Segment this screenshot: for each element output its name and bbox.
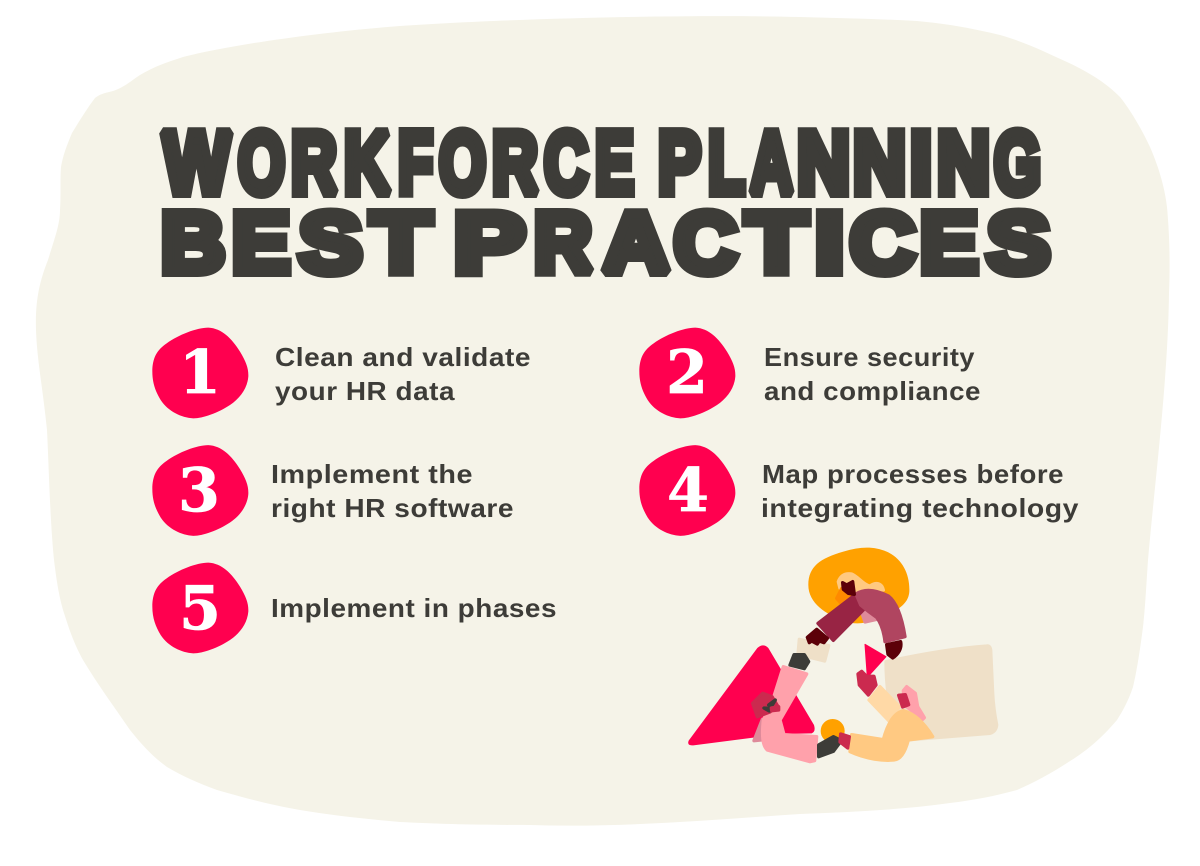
icon: number 2 badge — [639, 328, 735, 418]
title: O — [238, 113, 285, 212]
title: N — [853, 113, 906, 212]
large red triangle — [688, 645, 815, 745]
right person — [840, 671, 933, 760]
text: item 5: Implement in phases — [271, 593, 557, 623]
title: P — [658, 113, 701, 212]
title: C — [674, 196, 737, 291]
text: item 3: right HR software — [271, 493, 514, 523]
title: E — [232, 196, 290, 291]
title: E — [595, 113, 634, 212]
title: S — [299, 196, 362, 291]
icon: number 5 badge — [152, 563, 248, 653]
title: E — [920, 196, 978, 291]
title: C — [544, 113, 588, 212]
text: item 2: and compliance — [764, 376, 981, 406]
title: I — [910, 113, 932, 212]
item 4 — [639, 445, 1079, 536]
text: item 4 — [761, 459, 1079, 523]
title: R — [291, 113, 337, 212]
icon: number 5 badge: 5 — [179, 574, 221, 644]
title: W — [163, 113, 230, 212]
title: N — [937, 113, 990, 212]
text: item 4: integrating technology — [761, 493, 1079, 523]
icon: number 1 badge — [152, 328, 248, 418]
title: B — [161, 196, 225, 291]
title: K — [344, 113, 390, 212]
beige square — [886, 646, 997, 740]
item 5 — [152, 563, 557, 653]
title: T — [371, 196, 431, 291]
illustration: three people exchanging shapes — [688, 548, 997, 762]
top person — [807, 574, 905, 658]
title: P — [454, 196, 525, 291]
icon: number 1 badge: 1 — [179, 338, 221, 408]
title: I — [815, 196, 844, 291]
text: item 1 — [275, 342, 531, 406]
icon: number 3 badge — [152, 445, 248, 536]
small red triangle — [865, 644, 886, 677]
text: item 2: Ensure security — [764, 342, 975, 372]
item 1 — [152, 328, 531, 418]
text: item 3: Implement the — [271, 459, 473, 489]
text: item 3 — [271, 459, 514, 523]
title: R — [534, 196, 592, 291]
text: item 1: your HR data — [275, 376, 455, 406]
item 2 — [639, 328, 981, 418]
text: item 4: Map processes before — [762, 459, 1064, 489]
title: F — [398, 113, 433, 212]
title: L — [708, 113, 745, 212]
icon: number 4 badge — [639, 445, 735, 536]
title: C — [850, 196, 915, 291]
title — [161, 113, 1050, 291]
title: R — [492, 113, 538, 212]
icon: number 3 badge: 3 — [178, 456, 220, 526]
title: G — [994, 113, 1041, 212]
title: A — [750, 113, 793, 212]
icon: number 4 badge: 4 — [667, 456, 709, 526]
item 3 — [152, 445, 514, 536]
text: item 1: Clean and validate — [275, 342, 531, 372]
title: T — [746, 196, 807, 291]
left person — [753, 655, 817, 762]
title: O — [439, 113, 486, 212]
title: N — [797, 113, 850, 212]
title: A — [603, 196, 669, 291]
orange ball — [821, 719, 845, 743]
orange blob — [808, 548, 909, 623]
text: item 2 — [764, 342, 981, 406]
dark hand — [819, 737, 841, 757]
title: S — [987, 196, 1050, 291]
icon: number 2 badge: 2 — [666, 338, 708, 408]
note card — [798, 639, 829, 661]
